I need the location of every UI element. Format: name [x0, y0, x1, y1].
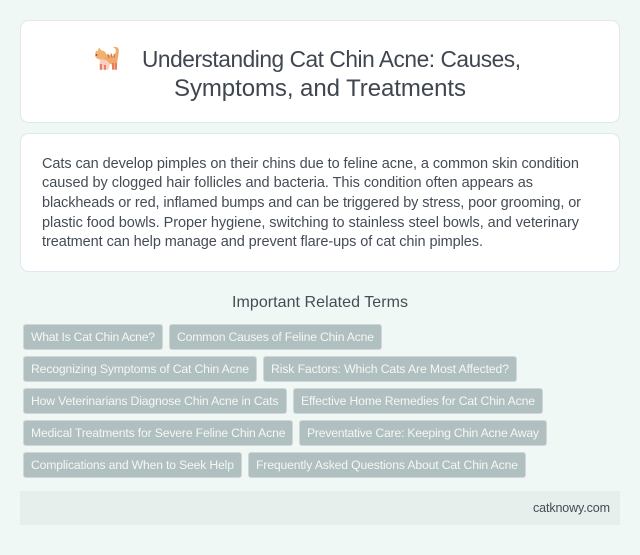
- icon: cat: [95, 47, 119, 70]
- title text: Understanding Cat Chin Acne: Causes,: [142, 46, 521, 72]
- description text: plastic food bowls. Proper hygiene, switching to stainless steel bowls, and veterinary: [42, 215, 580, 231]
- tag: Frequently Asked Questions About Cat Chin Acne: [256, 458, 518, 472]
- tag: [248, 452, 526, 478]
- panel: description: [20, 134, 620, 272]
- panel: title card: [20, 20, 620, 122]
- tag: Effective Home Remedies for Cat Chin Acne: [301, 394, 535, 408]
- tag: [300, 420, 546, 446]
- description text: Cats can develop pimples on their chins due to feline acne, a common skin condition: [42, 156, 579, 172]
- title text: [142, 46, 521, 102]
- tag list: [24, 324, 546, 478]
- tag: What Is Cat Chin Acne?: [31, 330, 155, 344]
- title text: Symptoms, and Treatments: [174, 75, 466, 102]
- tag: [24, 356, 256, 382]
- footer source text: catknowy.com: [533, 501, 610, 515]
- footer: [20, 491, 620, 525]
- tag: Medical Treatments for Severe Feline Chin Acne: [31, 426, 286, 440]
- description text: [42, 156, 581, 250]
- tag: [294, 388, 542, 414]
- tag: Recognizing Symptoms of Cat Chin Acne: [31, 362, 249, 376]
- tag: Preventative Care: Keeping Chin Acne Away: [307, 426, 540, 440]
- tag: How Veterinarians Diagnose Chin Acne in Cats: [31, 394, 278, 408]
- description text: caused by clogged hair follicles and bacteria. This condition often appears as: [42, 175, 533, 191]
- tag: [24, 452, 242, 478]
- tag: [170, 324, 382, 350]
- tag: Risk Factors: Which Cats Are Most Affected?: [271, 362, 509, 376]
- tag: [24, 388, 286, 414]
- tag: Complications and When to Seek Help: [31, 458, 234, 472]
- tag: Common Causes of Feline Chin Acne: [177, 330, 374, 344]
- tag: [24, 420, 292, 446]
- description text: treatment can help manage and prevent flare-ups of cat chin pimples.: [42, 234, 483, 250]
- description text: blackheads or red, inflamed bumps and can be triggered by stress, poor grooming, or: [42, 195, 581, 211]
- tag: [24, 324, 162, 350]
- tag: [264, 356, 516, 382]
- heading: related terms: Important Related Terms: [232, 294, 408, 311]
